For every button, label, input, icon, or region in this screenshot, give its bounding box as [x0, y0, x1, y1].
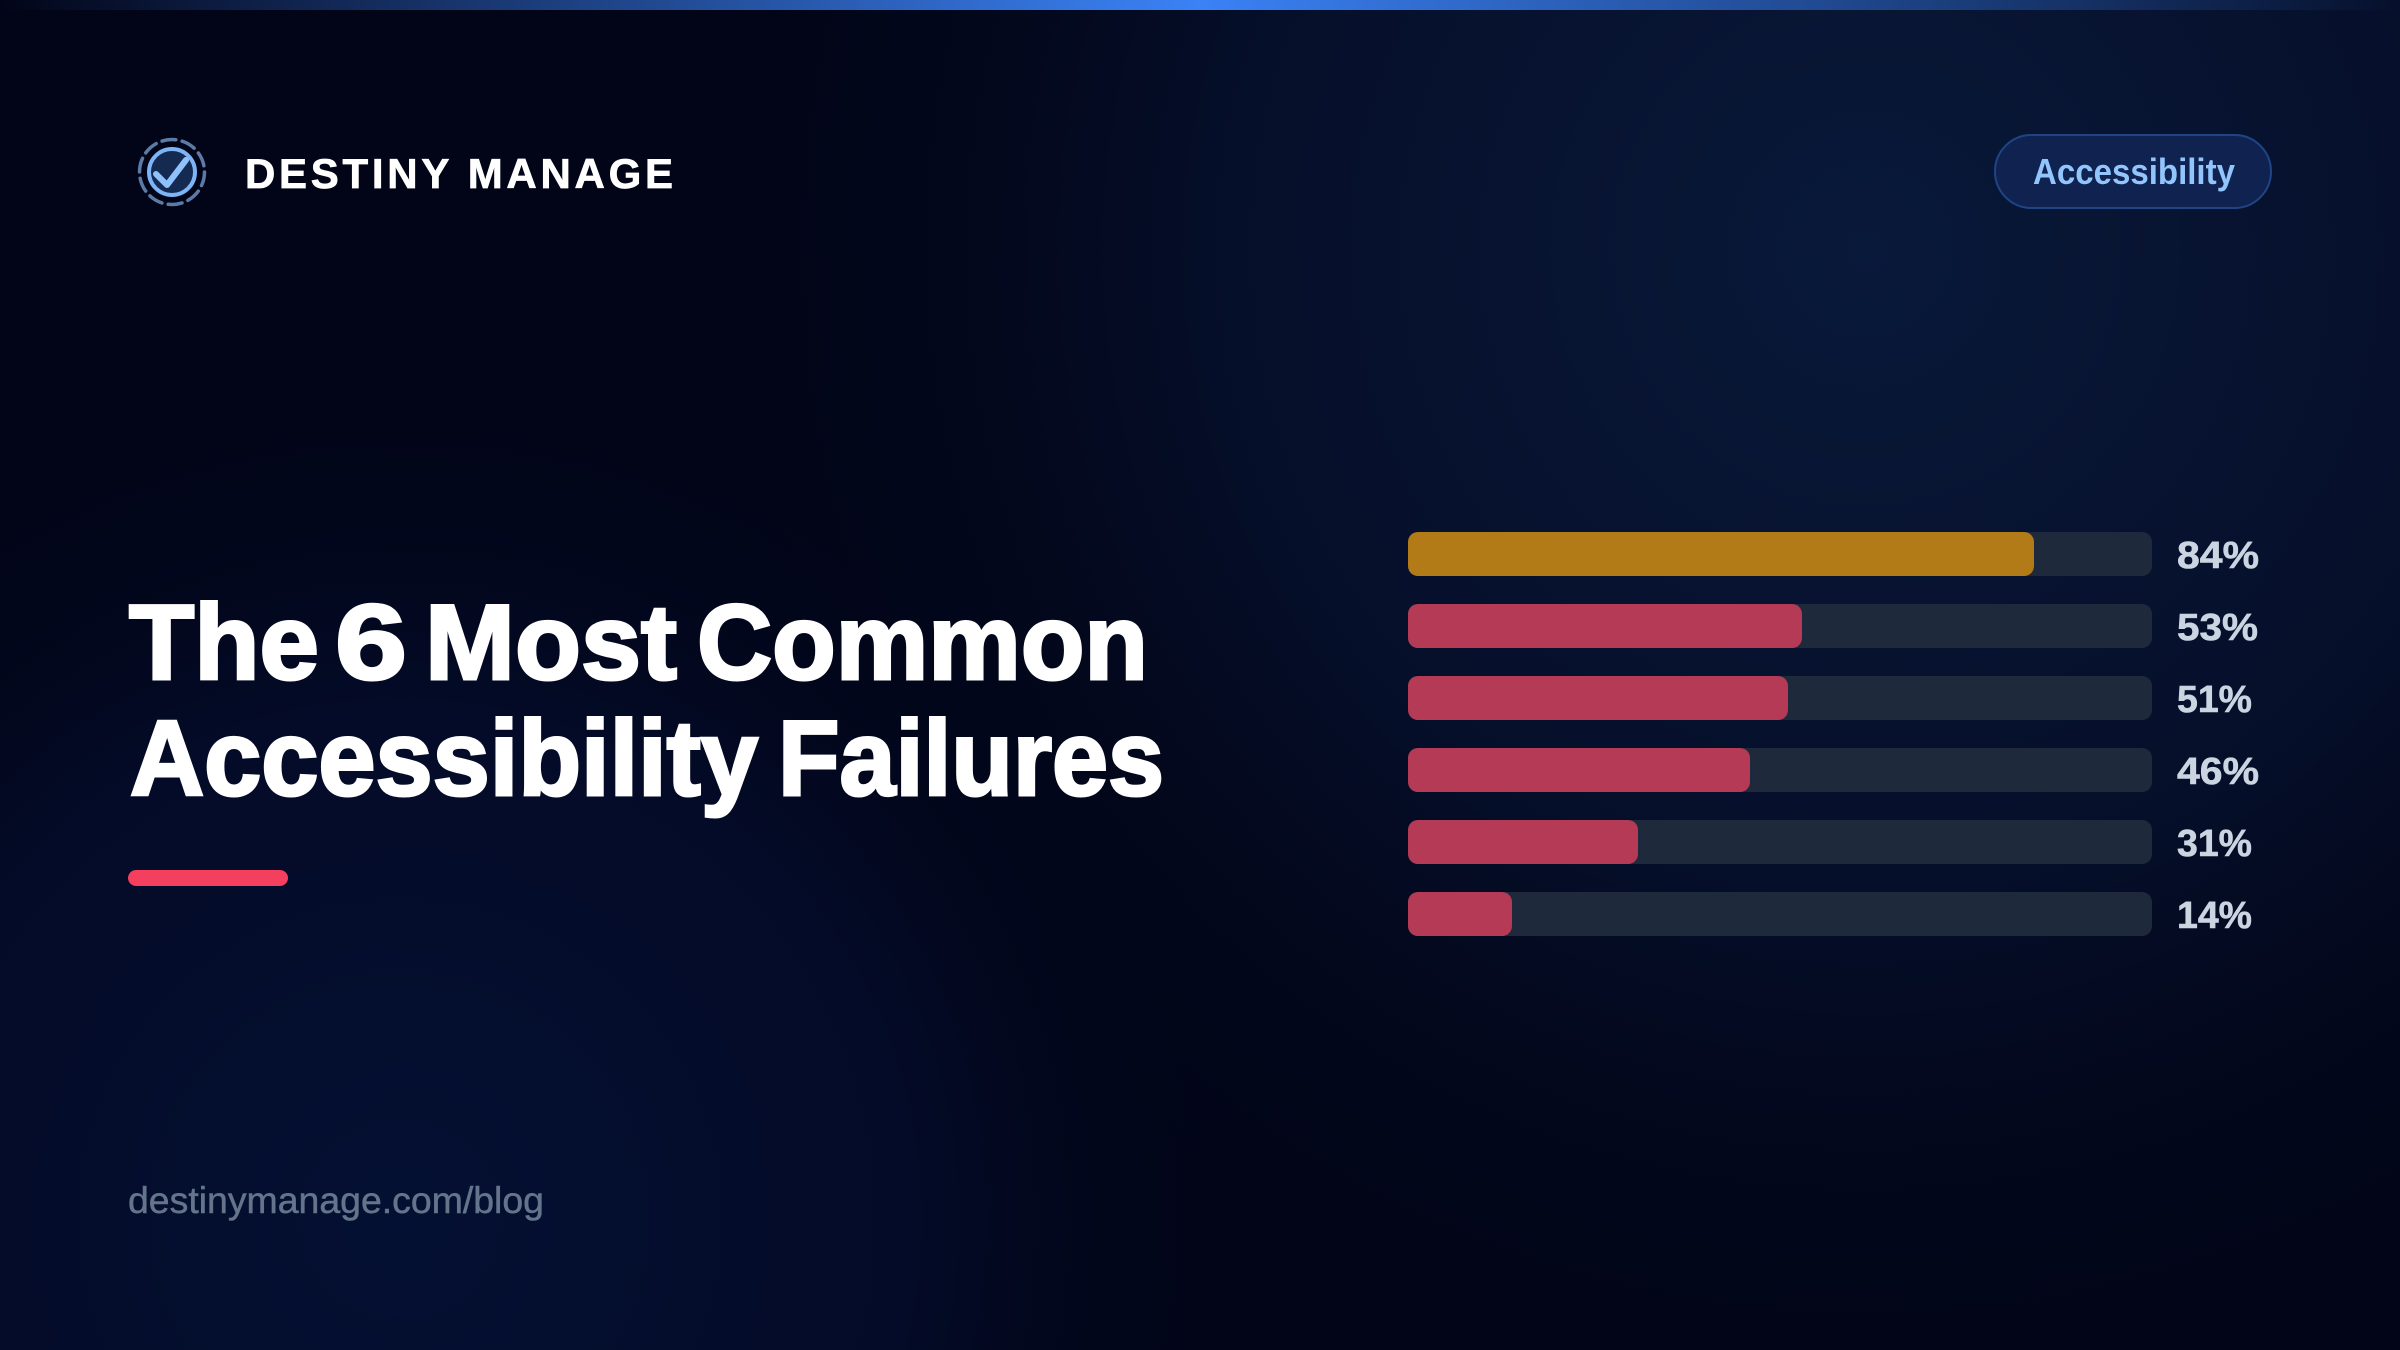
- bar: 51%: [1408, 676, 2252, 721]
- bar: 84%: 84%: [2177, 535, 2259, 577]
- bar: 53%: [1408, 604, 2258, 649]
- accent underline: [128, 870, 288, 886]
- bar: 46%: [1408, 748, 2259, 793]
- bar: 31%: 31%: [2177, 823, 2252, 865]
- category pill: Accessibility: [2033, 151, 2235, 192]
- icon: dashed circle with check mark: [140, 140, 204, 204]
- top accent bar: [0, 0, 2400, 10]
- bar: 84%: [1408, 532, 2259, 577]
- bar: 14%: [1408, 892, 2252, 937]
- title: [129, 582, 1164, 818]
- title: Common: [697, 582, 1148, 702]
- bar: 53%: 53%: [2177, 607, 2258, 649]
- brand name: DESTINY MANAGE: [245, 150, 673, 197]
- title: Accessibility: [130, 698, 758, 818]
- footer url: destinymanage.com/blog: [128, 1180, 544, 1221]
- bar: 31%: [1408, 820, 2252, 865]
- bar: 14%: 14%: [2177, 895, 2252, 937]
- bar: 46%: 46%: [2177, 751, 2259, 793]
- title: The: [129, 582, 319, 702]
- bar: 51%: 51%: [2177, 679, 2252, 721]
- title: Failures: [778, 698, 1164, 818]
- title: Most: [425, 582, 677, 702]
- category pill: [1995, 135, 2271, 208]
- title: 6: [335, 582, 407, 702]
- bar chart: [1408, 532, 2259, 937]
